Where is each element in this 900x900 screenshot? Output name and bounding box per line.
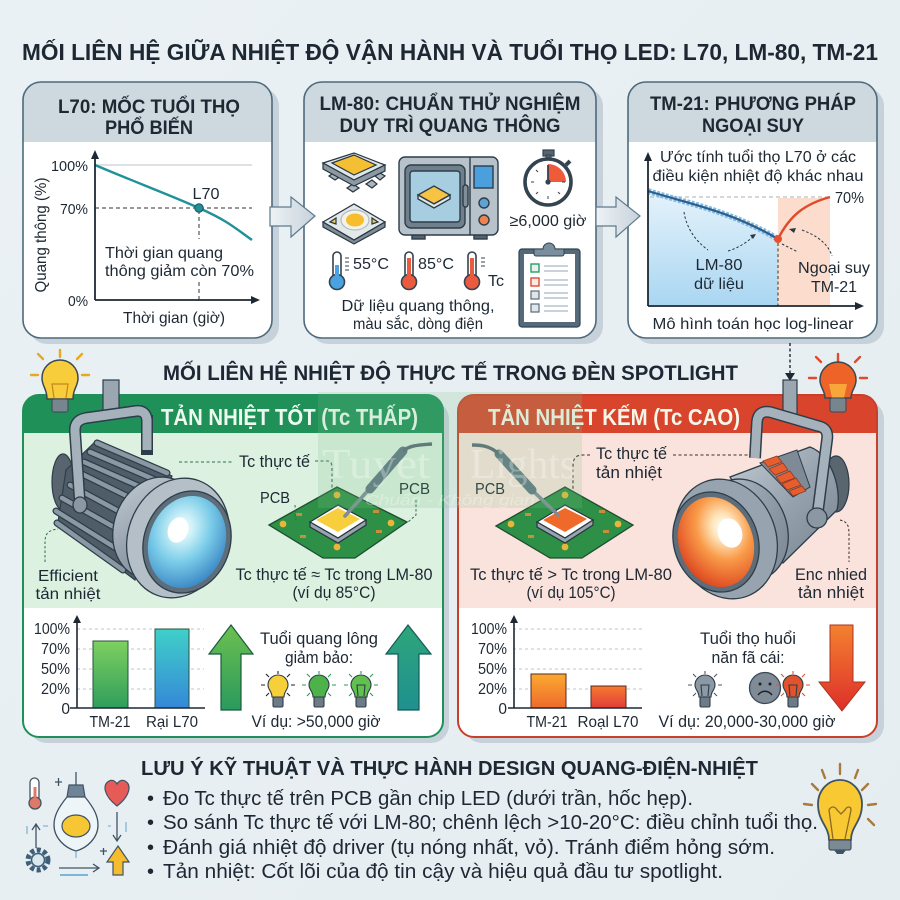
watermark: Lights: [470, 442, 576, 488]
chart: TM-21 extrapolation: TM-21: [811, 279, 857, 296]
icon: thermometer 85°C: 85°C: [418, 256, 454, 273]
chart: TM-21 extrapolation: dữ liệu: [694, 276, 744, 293]
panel: L70: [23, 82, 279, 344]
title: MỐI LIÊN HỆ GIỮA NHIỆT ĐỘ VẬN HÀNH VÀ TUỔI THỌ LED: L70, LM-80, TM-21: [22, 38, 878, 65]
icon: thermometer 55°C: [330, 252, 389, 290]
bar chart: poor cooling: Roạl L70: [578, 714, 639, 731]
watermark: Chuẩn - Không gian: [365, 492, 535, 509]
heading: LM-80: [320, 93, 580, 137]
subtitle: MỐI LIÊN HỆ NHIỆT ĐỘ THỰC TẾ TRONG ĐÈN SPOTLIGHT: [163, 361, 738, 385]
chart: L70 decay curve: [33, 150, 260, 327]
text: design notes: Đánh giá nhiệt độ driver (tụ nóng nhất, vỏ). Tránh điểm hỏng sớm.: [163, 837, 775, 859]
bar chart: poor cooling: 70%: [478, 641, 507, 658]
bar chart: good cooling: [34, 615, 205, 731]
text: good Tc comparison: Tc thực tế ≈ Tc trong LM-80: [236, 566, 432, 584]
text: design notes: [147, 788, 818, 883]
heading: good cooling: TẢN NHIỆT TỐT (Tc THẤP): [161, 402, 418, 430]
heading: L70: [58, 96, 240, 139]
icon: cool PCB chip with probe: [269, 444, 432, 558]
icon: thermometer 55°C: 55°C: [353, 256, 389, 273]
text: LM-80 data: Dữ liệu quang thông,: [342, 298, 494, 315]
panel: TM-21: [628, 82, 884, 344]
text: poor lifetime: [700, 630, 796, 667]
text: design notes: Tản nhiệt: Cốt lõi của độ tin cậy và hiệu quả đầu tư spotlight.: [163, 861, 723, 883]
callout: Tc on hot chip: tản nhiệt: [596, 464, 662, 482]
text: TM-21 description: Ước tính tuổi thọ L70 ở các: [660, 148, 856, 166]
bar chart: poor cooling: 100%: [471, 621, 507, 638]
callout: efficient cooling: tản nhiệt: [36, 586, 101, 603]
icon: yellow bulb: [261, 671, 295, 707]
chart: TM-21 extrapolation: LM-80: [696, 257, 743, 274]
bar chart: good cooling: 50%: [41, 661, 70, 678]
chart: TM-21 extrapolation: 70%: [835, 190, 864, 207]
heading: poor cooling: TẢN NHIỆT KẾM (Tc CAO): [488, 402, 740, 430]
bar chart: good cooling: 70%: [41, 641, 70, 658]
arrow: up green: [209, 625, 253, 710]
icon: green bulb with filament: [344, 671, 378, 707]
text: poor Tc comparison: Tc thực tế > Tc trong LM-80: [470, 566, 672, 584]
icon: cool spotlight: [52, 380, 246, 612]
callout: poor cooling: [795, 520, 867, 602]
label: good hours: Ví dụ: >50,000 giờ: [252, 713, 381, 731]
panel: good cooling: [23, 380, 449, 743]
icon: green bulb: [302, 671, 336, 707]
text: design notes: •: [147, 837, 154, 859]
text: good Tc comparison: [236, 566, 432, 602]
icon: test oven: [399, 157, 498, 239]
text: good lifetime: [260, 630, 378, 667]
bar chart: good cooling: 100%: [34, 621, 70, 638]
callout: efficient cooling: Efficient: [38, 568, 99, 585]
heading: L70: PHỔ BIẾN: [105, 117, 193, 139]
label: PCB hot: PCB: [475, 481, 505, 498]
chart: L70 decay curve: 70%: [60, 201, 88, 218]
watermark: [318, 392, 582, 509]
heading: design notes: LƯU Ý KỸ THUẬT VÀ THỰC HÀNH DESIGN QUANG-ĐIỆN-NHIỆT: [141, 756, 758, 780]
heading: TM-21: [650, 93, 856, 137]
bar chart: poor cooling: [471, 615, 642, 731]
heading: LM-80: DUY TRÌ QUANG THÔNG: [340, 115, 560, 137]
chart: TM-21 extrapolation: [644, 152, 870, 333]
text: design notes: So sánh Tc thực tế với LM-80; chênh lệch >10-20°C: điều chỉnh tuổi thọ.: [163, 812, 818, 834]
icon: red bulb: [776, 671, 810, 707]
heading: TM-21: NGOẠI SUY: [702, 116, 804, 137]
text: design notes: •: [147, 788, 154, 810]
icon: yellow bulb top left: [31, 350, 89, 412]
text: poor Tc comparison: [470, 566, 672, 602]
icon: clipboard: [519, 243, 580, 327]
icon: LED chip square: [323, 153, 385, 192]
icon: large light bulb: [804, 764, 876, 854]
icon: sad face: [750, 672, 780, 704]
icon: stopwatch: [525, 150, 571, 205]
callout: Tc on hot chip: Tc thực tế: [596, 445, 667, 463]
text: TM-21 description: điều kiện nhiệt độ khác nhau: [652, 168, 864, 185]
text: good lifetime: Tuổi quang lông: [260, 630, 378, 648]
icon: thermometer 85°C: [402, 252, 454, 290]
icon: opto-electro-thermal diagram: [27, 772, 129, 875]
icon: hot PCB chip with probe: [472, 445, 633, 558]
bar chart: poor cooling: 50%: [478, 661, 507, 678]
chart: L70 decay curve: L70: [192, 186, 220, 203]
callout: efficient cooling: [36, 529, 101, 603]
text: poor Tc comparison: (ví dụ 105°C): [526, 584, 616, 602]
text: LM-80 data: màu sắc, dòng điện: [353, 314, 483, 333]
text: design notes: •: [147, 812, 154, 834]
label: PCB left: [260, 490, 296, 520]
heading: TM-21: TM-21: PHƯƠNG PHÁP: [650, 93, 856, 115]
icon: grey bulb: [688, 671, 722, 707]
arrow: down red: [819, 625, 865, 711]
heading: LM-80: LM-80: CHUẨN THỬ NGHIỆM: [320, 93, 580, 115]
icon: thermometer Tc: Tc: [488, 273, 504, 290]
label: test hours: ≥6,000 giờ: [510, 213, 587, 230]
callout: Tc on hot chip: [573, 445, 750, 512]
chart: L70 decay curve: Quang thông (%): [33, 178, 50, 292]
chart: L70 decay curve: 0%: [68, 293, 88, 310]
arrow: L70 to LM-80: [270, 197, 315, 237]
callout: Tc on cool spotlight: Tc thực tế: [239, 453, 310, 471]
label: PCB right: PCB: [399, 481, 430, 498]
icon: hot spotlight: [658, 380, 849, 613]
arrow: up teal: [386, 625, 431, 710]
text: design notes: Đo Tc thực tế trên PCB gần chip LED (dưới trần, hốc hẹp).: [163, 788, 693, 810]
bar chart: poor cooling: TM-21: [526, 714, 568, 731]
panel: LM-80: [304, 82, 603, 344]
bar chart: poor cooling: 0: [498, 701, 507, 718]
bar chart: good cooling: 0: [61, 701, 70, 718]
callout: poor cooling: tản nhiệt: [798, 584, 864, 602]
text: good lifetime: giảm bảo:: [285, 649, 353, 667]
callout: poor cooling: Enc nhied: [795, 566, 867, 584]
bar chart: good cooling: TM-21: [90, 714, 131, 731]
panel: poor cooling: [458, 380, 884, 743]
chart: L70 decay curve: thông giảm còn 70%: [105, 263, 254, 280]
heading: L70: L70: MỐC TUỔI THỌ: [58, 96, 240, 118]
chart: L70 decay curve: 100%: [51, 158, 88, 175]
text: poor lifetime: Tuổi thọ huổi: [700, 630, 796, 648]
bar chart: good cooling: Rại L70: [146, 714, 198, 731]
bar chart: poor cooling: 20%: [478, 681, 507, 698]
callout: Tc on cool spotlight: [179, 453, 332, 490]
text: design notes: •: [147, 861, 154, 883]
icon: LED chip round: [323, 204, 385, 244]
icon: thermometer Tc: [464, 252, 504, 290]
chart: L70 decay curve: Thời gian (giờ): [123, 310, 225, 327]
text: good Tc comparison: (ví dụ 85°C): [292, 584, 376, 602]
arrow: dashed down to red panel: [785, 343, 795, 381]
icon: orange bulb top right: [809, 354, 867, 412]
label: PCB left: PCB: [260, 490, 290, 507]
watermark: Tuyet: [322, 442, 430, 488]
label: PCB right: [399, 481, 430, 522]
chart: TM-21 extrapolation: Ngoại suy: [798, 260, 870, 277]
text: TM-21 description: [652, 148, 864, 185]
text: poor lifetime: năn fã cái:: [712, 649, 784, 667]
label: poor hours: Ví dụ: 20,000-30,000 giờ: [658, 713, 836, 731]
chart: L70 decay curve: Thời gian quang: [105, 245, 223, 262]
bar chart: good cooling: 20%: [41, 681, 70, 698]
chart: TM-21 extrapolation: Mô hình toán học log-linear: [652, 316, 854, 333]
arrow: LM-80 to TM-21: [596, 197, 640, 237]
text: LM-80 data: [342, 298, 494, 333]
